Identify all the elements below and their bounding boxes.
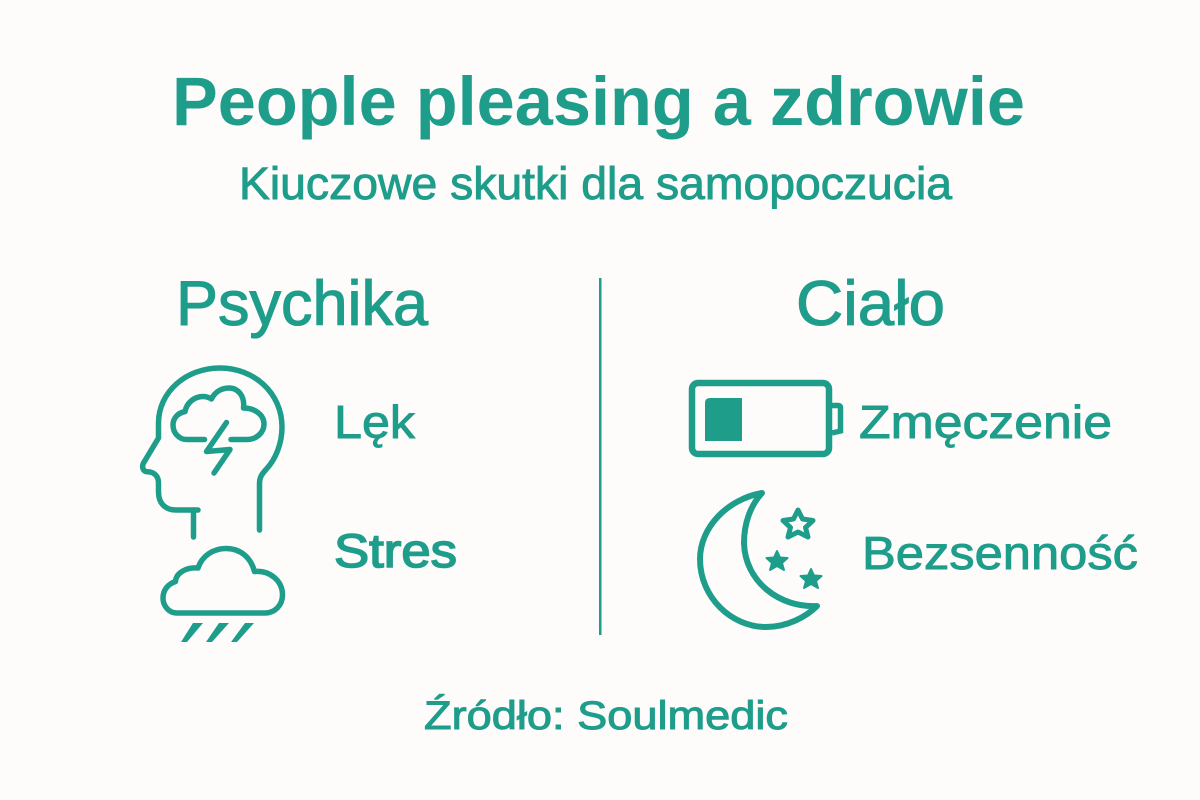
heading: Psychika: Psychika xyxy=(176,269,429,339)
heading: Ciało: Ciało xyxy=(796,269,945,339)
panel: ciało xyxy=(692,269,1138,627)
icon: moon and stars xyxy=(700,493,822,627)
title: People pleasing a zdrowie xyxy=(172,63,1025,140)
label: Stres: Stres xyxy=(334,524,457,577)
label: Bezsenność: Bezsenność xyxy=(862,527,1138,579)
label: Lęk: Lęk xyxy=(334,396,416,448)
source: Źródło: Soulmedic xyxy=(424,693,788,738)
icon: rain cloud xyxy=(163,548,282,642)
subtitle: Kiuczowe skutki dla samopoczucia xyxy=(239,158,953,209)
panel: psychika xyxy=(143,269,457,642)
icon: head with storm cloud xyxy=(143,368,282,537)
divider xyxy=(599,278,602,635)
icon: low battery xyxy=(692,383,840,454)
label: Zmęczenie: Zmęczenie xyxy=(859,396,1112,448)
